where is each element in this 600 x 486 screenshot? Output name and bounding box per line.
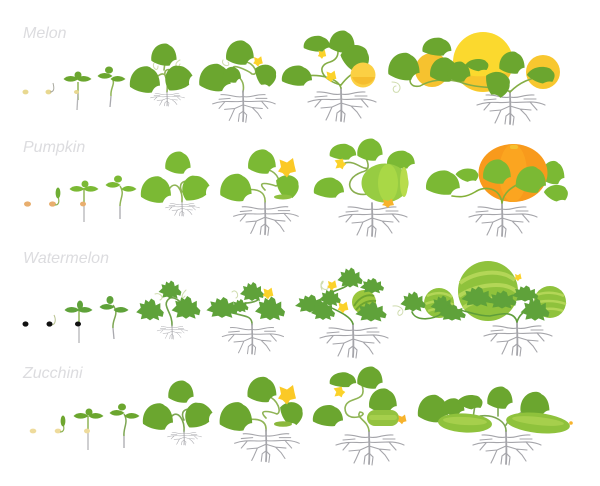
- stage 6: watermelon plant with flower: [206, 282, 285, 355]
- stage 5: melon plant with leaves: [130, 43, 196, 106]
- heading: Melon: Melon: [23, 25, 67, 42]
- stage 2: zucchini sprout: [55, 416, 65, 433]
- stage 4: watermelon young plant: [100, 296, 128, 339]
- heading: Zucchini: Zucchini: [22, 365, 83, 382]
- stage 5: zucchini plant with leaves: [143, 380, 216, 445]
- stage 6: zucchini plant with flower: [220, 377, 308, 462]
- stage 2: watermelon sprout: [46, 315, 55, 327]
- stage 3: pumpkin seedling: [70, 180, 98, 222]
- stage 8: melon mature plant with three fruits: [388, 32, 560, 125]
- stage 1: zucchini seed: [30, 429, 36, 433]
- stage 3: zucchini seedling: [74, 408, 104, 450]
- stage 7: zucchini plant with fruit: [313, 366, 406, 465]
- stage 5: watermelon plant with lobed leaves: [136, 280, 200, 339]
- heading: Pumpkin: Pumpkin: [23, 139, 85, 156]
- stage 3: watermelon seedling: [64, 300, 92, 343]
- stage 1: melon seed: [22, 90, 28, 94]
- stage 1: watermelon seed: [22, 321, 28, 327]
- row: watermelon: [22, 250, 566, 358]
- stage 5: pumpkin plant with leaves: [141, 151, 213, 216]
- stage 8: zucchini mature plant with two fruits: [418, 386, 573, 465]
- stage 4: zucchini young plant: [110, 404, 140, 448]
- stage 2: melon sprout: [46, 83, 54, 94]
- stage 4: melon young plant: [98, 66, 126, 107]
- stage 7: watermelon plant with fruit: [295, 268, 388, 358]
- row: pumpkin: [23, 138, 573, 237]
- stage 7: melon plant with fruit: [282, 30, 376, 122]
- stage 2: pumpkin sprout: [49, 188, 60, 207]
- stage 8: pumpkin mature plant with orange fruit: [426, 144, 573, 237]
- stage 4: pumpkin young plant: [106, 176, 136, 219]
- row: zucchini: [22, 365, 573, 465]
- stage 6: melon plant with flower: [199, 40, 281, 122]
- stage 3: melon seedling: [64, 72, 92, 110]
- stage 1: pumpkin seed: [24, 201, 31, 207]
- stage 7: pumpkin plant with green fruit: [314, 138, 415, 237]
- stage 6: pumpkin plant with flower: [220, 149, 304, 235]
- row: melon: [22, 25, 560, 125]
- stage 8: watermelon mature plant with three fruits: [393, 261, 566, 356]
- heading: Watermelon: Watermelon: [23, 250, 109, 267]
